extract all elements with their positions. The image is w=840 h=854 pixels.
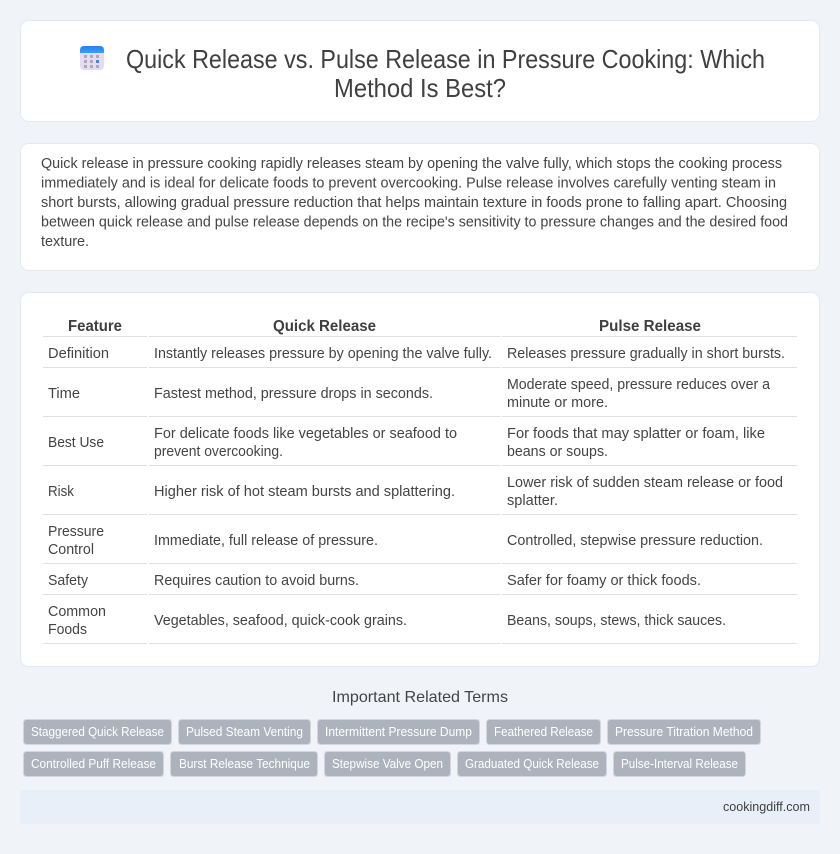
row: common foods: Vegetables, seafood, quick-cook grains.: [154, 613, 407, 629]
row: pressure control: Control: [48, 542, 94, 558]
row: safety: Requires caution to avoid burns.: [154, 573, 359, 589]
related term chips: Stepwise Valve Open: [332, 756, 443, 771]
row: best use: beans or soups.: [507, 444, 608, 460]
title: Method Is Best?: [334, 73, 506, 103]
row: best use: For delicate foods like vegetables or seafood to: [154, 426, 457, 442]
row: risk: Lower risk of sudden steam release or food: [507, 475, 783, 491]
row: common foods: Foods: [48, 622, 87, 638]
row: time: Fastest method, pressure drops in seconds.: [154, 386, 433, 402]
related term chips: Feathered Release: [494, 724, 593, 739]
row: definition: Instantly releases pressure by opening the valve fully.: [154, 346, 492, 362]
row: time: Moderate speed, pressure reduces over a: [507, 377, 771, 393]
text block: summary: [41, 156, 788, 250]
related term chips: [24, 720, 760, 776]
table header row: [68, 318, 701, 335]
row: time: [48, 377, 771, 411]
related term chips: Graduated Quick Release: [465, 756, 599, 771]
row: common foods: [48, 604, 726, 638]
text block: summary: short bursts, allowing gradual pressure reduction that helps maintain texture in foods prone to falling apart. Choosing: [41, 195, 787, 211]
text block: summary: between quick release and pulse release depends on the recipe's sensitivity to pressure changes and the desired food: [41, 214, 788, 230]
row: common foods: Beans, soups, stews, thick sauces.: [507, 613, 726, 629]
row: risk: Risk: [48, 484, 75, 500]
row: risk: Higher risk of hot steam bursts and splattering.: [154, 484, 455, 500]
related term chips: Controlled Puff Release: [31, 756, 156, 771]
row: common foods: Common: [48, 604, 106, 620]
related term chips: Pulse-Interval Release: [621, 756, 738, 771]
panel: summary paragraph: [20, 144, 820, 270]
footer: cookingdiff.com: [723, 799, 810, 814]
text block: summary: immediately and is ideal for delicate foods to prevent overcooking. Pulse release involves carefully venting steam in: [41, 176, 776, 192]
heading: related terms: Important Related Terms: [332, 689, 508, 706]
row: safety: Safer for foamy or thick foods.: [507, 573, 701, 589]
row: safety: [48, 573, 701, 589]
row: risk: [48, 475, 783, 509]
panel: comparison table: [20, 292, 820, 666]
row: definition: [48, 346, 785, 362]
panel: header: [20, 20, 820, 122]
row: risk: splatter.: [507, 493, 558, 509]
footer: [20, 790, 820, 824]
row: best use: For foods that may splatter or foam, like: [507, 426, 765, 442]
row: best use: Best Use: [48, 435, 104, 451]
row: best use: [48, 426, 765, 460]
row: time: minute or more.: [507, 395, 608, 411]
row: pressure control: Pressure: [48, 524, 104, 540]
row: pressure control: Controlled, stepwise pressure reduction.: [507, 533, 763, 549]
title: Quick Release vs. Pulse Release in Pressure Cooking: Which: [126, 44, 765, 74]
related term chips: Pulsed Steam Venting: [186, 724, 303, 739]
row: best use: prevent overcooking.: [154, 444, 283, 460]
table header row: Feature: [68, 318, 122, 335]
row: time: Time: [48, 386, 80, 402]
title: [126, 44, 765, 103]
row: definition: Releases pressure gradually in short bursts.: [507, 346, 785, 362]
row: pressure control: [48, 524, 763, 558]
row: pressure control: Immediate, full release of pressure.: [154, 533, 378, 549]
related term chips: Burst Release Technique: [179, 756, 310, 771]
related term chips: Pressure Titration Method: [615, 724, 753, 739]
icon: calendar: [80, 46, 104, 70]
text block: summary: texture.: [41, 234, 89, 250]
row: safety: Safety: [48, 573, 89, 589]
related term chips: Staggered Quick Release: [31, 724, 164, 739]
related term chips: Intermittent Pressure Dump: [325, 724, 472, 739]
text block: summary: Quick release in pressure cooking rapidly releases steam by opening the valve fully, which stops the cooking process: [41, 156, 782, 172]
table header row: Pulse Release: [599, 318, 701, 335]
table header row: Quick Release: [273, 318, 376, 335]
row: definition: Definition: [48, 346, 109, 362]
